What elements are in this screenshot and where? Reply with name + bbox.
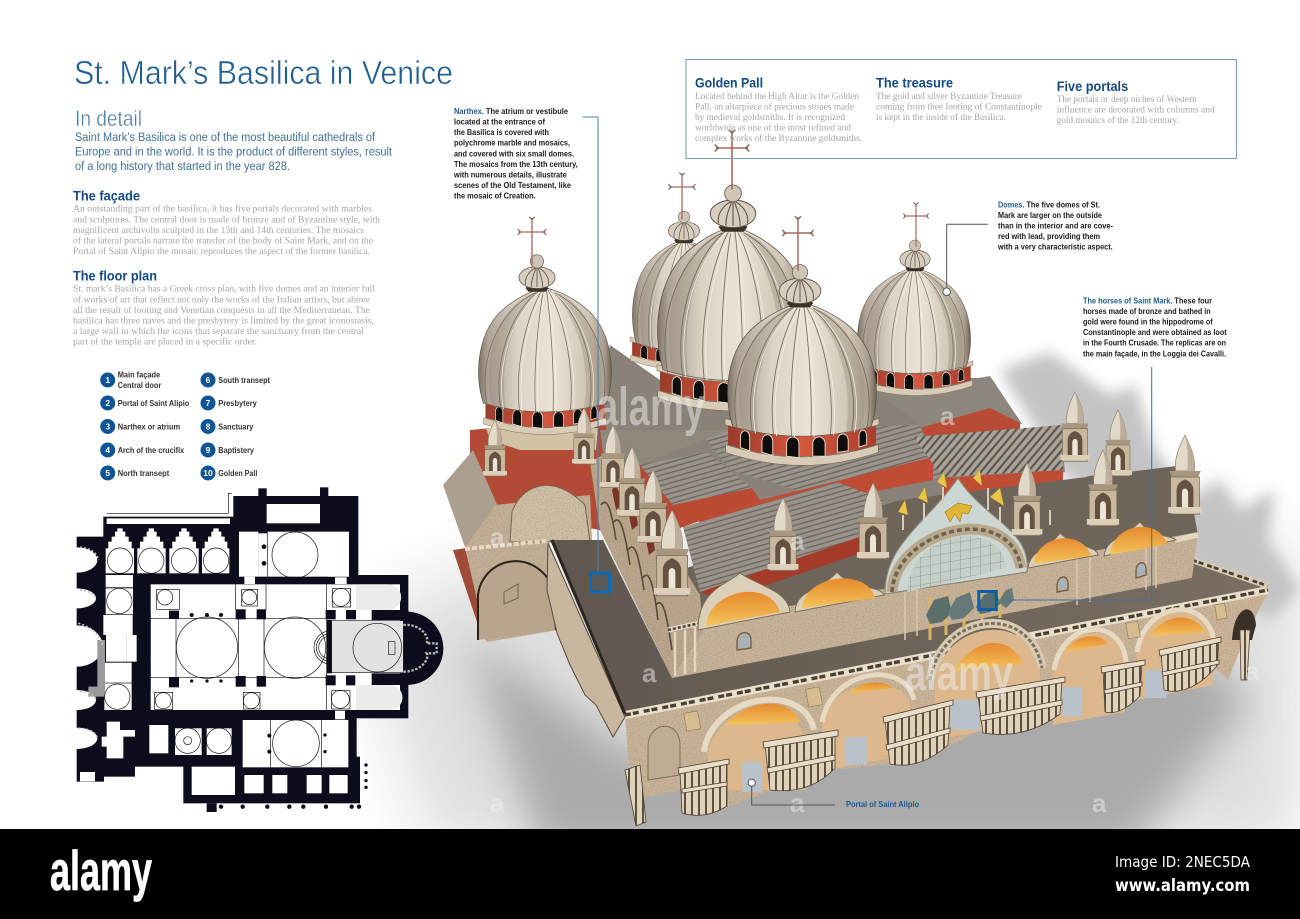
- building ground shadow: [360, 352, 1300, 850]
- floor plan: west niches and grey zone: [78, 547, 105, 738]
- watermark: a: [790, 526, 805, 556]
- callout: domes: Mark are larger on the outside: [998, 210, 1102, 220]
- legend: Narthex or atrium: [118, 422, 180, 432]
- callout: horses: in the Fourth Crusade. The replicas are on: [1083, 338, 1226, 348]
- box item: five portals: Five portals: [1057, 78, 1128, 94]
- text: the facade: magnificent archivolts sculpted in the 13th and 14th centuries. The mosaics: [73, 225, 364, 236]
- watermark: a: [1245, 656, 1260, 686]
- legend: Sanctuary: [218, 422, 254, 432]
- callout: portal of saint alipio: [748, 779, 919, 809]
- footer bar: www.alamy.com: [1115, 876, 1250, 896]
- callout: narthex: polychrome marble and mosaics,: [454, 138, 570, 148]
- legend: South transept: [218, 376, 270, 385]
- floor plan: chancel and apse: [332, 584, 437, 710]
- gallery terrace floor: [550, 540, 1268, 713]
- callout: narthex: Narthex. The atrium or vestibule: [454, 106, 568, 116]
- watermark: a: [490, 522, 505, 552]
- legend: 3: [105, 422, 110, 432]
- legend: [100, 370, 270, 480]
- legend: 8: [206, 422, 211, 432]
- legend: Central door: [118, 381, 161, 390]
- basilica illustration: [443, 130, 1268, 826]
- upper facade: [590, 450, 1198, 678]
- upper terrace floor: [668, 465, 1198, 630]
- leader: horses: [1008, 367, 1152, 600]
- legend: Portal of Saint Alipio: [118, 399, 189, 408]
- text: the facade: and sculptures. The central door is made of bronze and of Byzantine style, with: [73, 214, 380, 225]
- lower facade balustrade: [552, 540, 1268, 715]
- box item: golden pall: Pall, an altarpiece of precious stones made: [695, 102, 854, 112]
- red strip under roof: [700, 530, 885, 600]
- box item: golden pall: Golden Pall: [695, 75, 763, 91]
- legend: Baptistery: [218, 446, 255, 455]
- callout: domes: with a very characteristic aspect.: [997, 242, 1113, 252]
- box item: golden pall: Located behind the High Altar is the Golden: [695, 91, 859, 102]
- watermark: alamy: [597, 377, 705, 437]
- horses of Saint Mark: [926, 588, 1014, 640]
- box item: golden pall: complex works of the Byzantine goldsmiths.: [695, 133, 862, 144]
- callout: horses: horses made of bronze and bathed in: [1083, 306, 1211, 316]
- callout: narthex: The mosaics from the 13th century,: [454, 159, 578, 169]
- legend: 9: [206, 445, 211, 455]
- heading: the facade: The façade: [73, 188, 140, 204]
- legend: 2: [105, 398, 110, 408]
- box item: the treasure: The treasure: [876, 75, 953, 91]
- callout: horses: the main façade, in the Loggia dei Cavalli.: [1083, 348, 1226, 358]
- text: the facade: of the lateral portals narrate the transfer of the body of Saint Mark, and on the: [73, 236, 373, 246]
- box item: the treasure: is kept in the inside of the Basilica.: [876, 112, 1006, 123]
- gold lion: [945, 503, 972, 522]
- box item: the treasure: coming from thee looting of Constantinople: [876, 102, 1042, 112]
- rear small domes: [1072, 476, 1168, 530]
- callout: narthex: the Basilica is covered with: [454, 127, 549, 137]
- subheading: in detail: In detail: [75, 106, 142, 131]
- legend: Golden Pall: [218, 469, 257, 478]
- box item: five portals: [1057, 78, 1215, 126]
- callout: domes: [997, 199, 1113, 252]
- upper facade lunettes: [698, 522, 1176, 630]
- callout: narthex: with numerous details, illustrate: [453, 170, 567, 180]
- callout markers: [590, 573, 996, 610]
- text: the facade: Portal of Saint Alipio the mosaic reproduces the aspect of the former basilica.: [73, 246, 370, 257]
- title: St. Mark’s Basilica in Venice: [74, 54, 453, 91]
- box item: the treasure: [876, 75, 1042, 123]
- text: the floor plan: all the result of looting and Venetian conquests in all the Mediterranean. The: [73, 305, 370, 316]
- dome: right: [857, 202, 973, 396]
- heading: the floor plan: The floor plan: [73, 268, 157, 284]
- legend: 7: [206, 398, 211, 408]
- legend: Presbytery: [218, 399, 257, 408]
- callout: narthex: scenes of the Old Testament, like: [454, 180, 571, 190]
- callout: horses: Constantinople and were obtained as loot: [1083, 327, 1227, 337]
- footer bar: [0, 829, 1300, 919]
- big grey roof: [683, 482, 884, 592]
- text: the floor plan: of works of art that reflect not only the works of the Italian artists, but above: [73, 294, 370, 305]
- leader: domes: [943, 224, 988, 296]
- dome: left: [479, 217, 611, 450]
- pinnacles and statues: [483, 392, 1202, 596]
- callout: domes: than in the interior and are cove-: [998, 220, 1113, 230]
- dome: front: [725, 216, 879, 465]
- legend: 6: [206, 375, 211, 385]
- watermark: a: [642, 658, 657, 688]
- rear roofs and red walls: [470, 345, 1065, 555]
- intro text: Saint Mark’s Basilica is one of the most beautiful cathedrals of: [75, 130, 376, 144]
- info box: [686, 60, 1236, 158]
- legend: North transept: [118, 469, 170, 478]
- central window with ogee arch: [885, 478, 1027, 594]
- arcade of the side wall: [601, 502, 672, 650]
- floor plan: [51, 487, 443, 812]
- box item: five portals: gold mosaics of the 12th century.: [1057, 115, 1179, 126]
- lower facade portals: [648, 603, 1256, 792]
- text: the facade: [73, 204, 380, 257]
- dome: back: [630, 173, 738, 370]
- lower facade: [552, 540, 1268, 826]
- box item: golden pall: [695, 75, 862, 144]
- footer bar: alamy: [50, 839, 152, 902]
- callout: portal of saint alipio: Portal of Saint Alipio: [846, 799, 919, 809]
- legend: 5: [105, 468, 110, 478]
- callout: domes: red with lead, providing them: [998, 231, 1100, 241]
- text: the floor plan: basilica has three naves and the presbytery is limited by the great iconostasis,: [73, 316, 374, 326]
- text: the floor plan: St. mark’s Basilica has a Greek cross plan, with five domes and an interior full: [73, 284, 375, 295]
- intro text: of a long history that started in the year 828.: [75, 159, 290, 173]
- footer bar: Image ID: 2NEC5DA: [1115, 853, 1251, 871]
- intro text: Europe and in the world. It is the product of different styles, result: [75, 144, 393, 158]
- watermark: a: [790, 788, 805, 818]
- callout: horses: The horses of Saint Mark. These four: [1083, 295, 1213, 305]
- callout: narthex: the mosaic of Creation.: [454, 191, 536, 201]
- watermark: a: [490, 788, 505, 818]
- legend: Main façade: [118, 370, 161, 380]
- box item: five portals: influence are decorated with columns and: [1057, 105, 1215, 116]
- intro text: [75, 130, 393, 173]
- box item: golden pall: worldwide as one of the most refined and: [695, 122, 851, 134]
- callout: horses: gold were found in the hippodrome of: [1083, 317, 1213, 327]
- box item: the treasure: The gold and silver Byzantine Treasure: [876, 91, 1022, 102]
- legend: 1: [105, 375, 110, 385]
- callout: horses: [1083, 295, 1227, 358]
- legend: Arch of the crucifix: [118, 446, 185, 455]
- legend: 4: [105, 445, 110, 455]
- text: the facade: An outstanding part of the basilica, it has five portals decorated with marbles: [73, 204, 372, 215]
- watermark: alamy: [905, 645, 1013, 701]
- leader: narthex: [583, 117, 598, 572]
- watermark: a: [940, 401, 955, 431]
- box item: golden pall: by medieval goldsmiths. It is recognized: [695, 112, 845, 123]
- text: the floor plan: a large wall in which the icons that separate the sanctuary from the central: [73, 326, 364, 337]
- legend: 10: [203, 468, 213, 478]
- box item: five portals: The portals or deep niches of Western: [1057, 94, 1197, 105]
- callout: narthex: and covered with six small domes.: [454, 148, 574, 158]
- callout: domes: Domes. The five domes of St.: [998, 199, 1100, 209]
- dome: central back: [657, 130, 809, 411]
- lower facade columns: [625, 630, 1250, 826]
- watermark: a: [1092, 788, 1107, 818]
- text: the floor plan: part of the temple are placed in a specific order.: [73, 337, 257, 348]
- lower gallery side wall: [547, 543, 625, 737]
- callout: narthex: located at the entrance of: [454, 117, 545, 127]
- callout: narthex: [453, 106, 578, 201]
- text: the floor plan: [73, 284, 375, 348]
- north arm: [443, 450, 592, 642]
- watermark: [490, 377, 1260, 818]
